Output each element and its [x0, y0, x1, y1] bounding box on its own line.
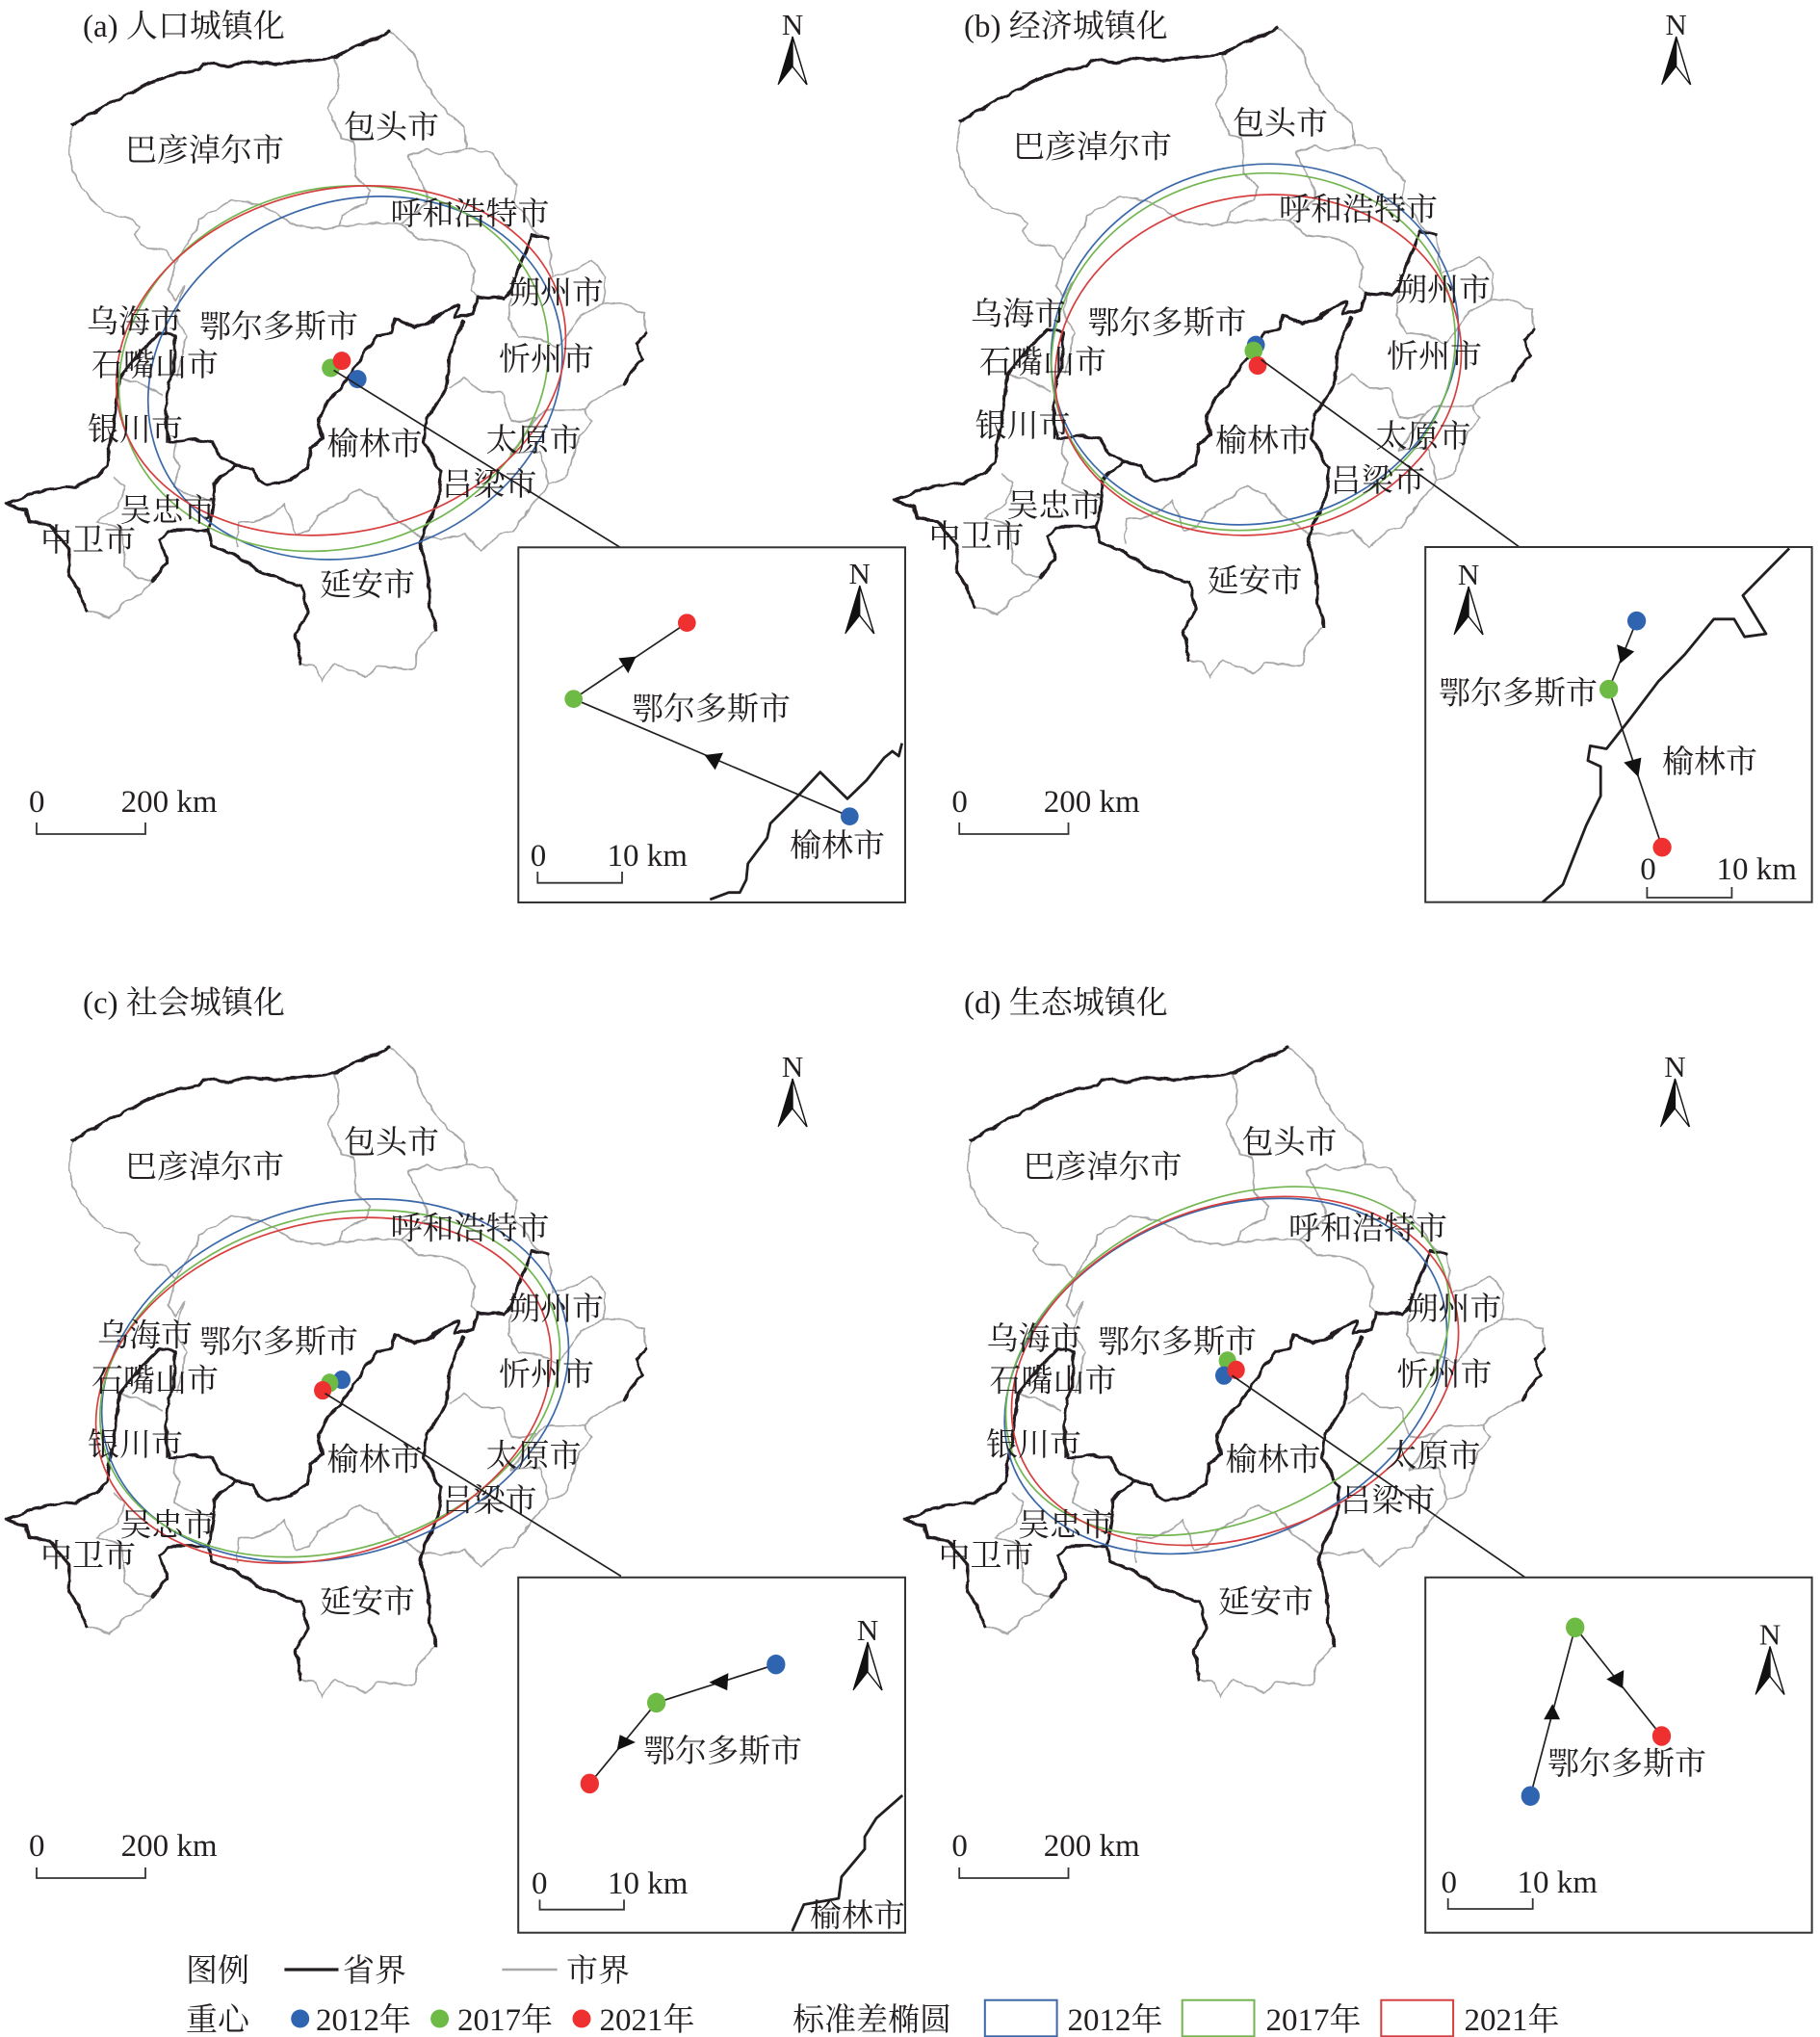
city labels d: 吕梁市 [1340, 1483, 1435, 1519]
centroids and connector c [314, 1371, 621, 1577]
legend: standard deviation ellipses: 2021年 [1464, 2002, 1560, 2037]
city labels a: 鄂尔多斯市 [199, 309, 358, 345]
centroids and connector a [322, 352, 620, 547]
base map c [7, 1047, 645, 1697]
city labels b: 乌海市 [971, 297, 1066, 332]
city labels a: 太原市 [485, 423, 582, 458]
legend: centroids [186, 2002, 695, 2037]
city labels a: 乌海市 [87, 304, 182, 340]
city labels a: 银川市 [88, 412, 183, 448]
city labels c: 银川市 [88, 1427, 183, 1463]
north arrow c [778, 1050, 807, 1127]
title a: (a) 人口城镇化 [83, 9, 285, 44]
north arrow d [1660, 1050, 1689, 1127]
city labels d: 榆林市 [1225, 1443, 1321, 1477]
panel: (b) economic urbanization [895, 8, 1812, 902]
city labels c: 榆林市 [327, 1443, 422, 1477]
scale bar b: 0 [951, 785, 968, 820]
city labels c: 吴忠市 [119, 1507, 216, 1543]
city labels a: 榆林市 [327, 427, 422, 462]
city labels a: 呼和浩特市 [391, 196, 549, 232]
legend: boundaries [186, 1953, 630, 1989]
city labels d: 忻州市 [1396, 1357, 1493, 1393]
city labels c [40, 1125, 604, 1620]
legend: centroids: 2017年 [457, 2002, 553, 2037]
city labels a: 朔州市 [508, 275, 604, 311]
inset d: 10 km [1518, 1866, 1598, 1900]
city labels a: 石嘴山市 [91, 348, 219, 383]
inset a: 10 km [607, 839, 688, 874]
city labels b [928, 106, 1491, 599]
city labels b: 包头市 [1233, 106, 1328, 142]
city labels b: 石嘴山市 [979, 345, 1106, 380]
city labels b: 鄂尔多斯市 [1088, 305, 1246, 341]
inset d: 0 [1441, 1866, 1457, 1900]
panel: (a) population urbanization [7, 8, 905, 902]
city labels b: 太原市 [1375, 419, 1471, 455]
title d: (d) 生态城镇化 [964, 985, 1168, 1021]
city labels d: 延安市 [1218, 1584, 1313, 1620]
legend: centroids: 重心 [186, 2002, 251, 2037]
city labels d: 呼和浩特市 [1288, 1212, 1447, 1247]
legend: centroids: 2012年 [316, 2002, 411, 2037]
inset c [518, 1578, 905, 1934]
city labels d: 巴彦淖尔市 [1023, 1150, 1183, 1186]
inset a: 鄂尔多斯市 [632, 692, 791, 727]
city labels b: 中卫市 [928, 519, 1025, 555]
city labels c: 巴彦淖尔市 [125, 1150, 284, 1186]
inset d [1425, 1578, 1812, 1933]
scale bar d: 200 km [1044, 1829, 1140, 1864]
scale bar c: 200 km [121, 1829, 218, 1864]
inset d: 鄂尔多斯市 [1547, 1746, 1706, 1782]
city labels a [40, 110, 604, 603]
base map b [895, 27, 1533, 677]
city labels c: 朔州市 [508, 1292, 604, 1327]
city labels a: 延安市 [320, 567, 415, 603]
city labels d: 吴忠市 [1018, 1507, 1113, 1543]
legend: boundaries: 市界 [566, 1953, 630, 1989]
scale bar a: 0 [29, 785, 44, 820]
city labels d: 鄂尔多斯市 [1098, 1324, 1257, 1360]
city labels d: 包头市 [1242, 1125, 1337, 1161]
city labels c: 呼和浩特市 [391, 1212, 549, 1247]
city labels c: 中卫市 [40, 1539, 136, 1574]
panel: (d) ecological urbanization [905, 985, 1812, 1933]
scale bar c [29, 1829, 218, 1878]
city labels b: 银川市 [975, 408, 1071, 444]
city labels b: 吕梁市 [1330, 463, 1425, 499]
legend: centroids: 2021年 [599, 2002, 695, 2037]
city labels b: 榆林市 [1215, 423, 1311, 458]
inset a: 0 [531, 839, 546, 874]
city labels c: 延安市 [320, 1584, 415, 1620]
city labels c: 包头市 [344, 1125, 439, 1161]
legend: standard deviation ellipses: 标准差椭圆 [793, 2002, 951, 2037]
city labels d: 石嘴山市 [990, 1363, 1117, 1398]
legend: standard deviation ellipses: 2012年 [1067, 2002, 1163, 2037]
base map a [7, 31, 645, 681]
inset b: 鄂尔多斯市 [1439, 675, 1598, 711]
city labels a: 忻州市 [499, 342, 594, 378]
scale bar d [951, 1829, 1140, 1878]
inset a [518, 547, 905, 902]
legend [186, 1953, 1560, 2037]
city labels c: 太原市 [485, 1439, 582, 1475]
standard deviation ellipses a [90, 186, 593, 560]
city labels b: 呼和浩特市 [1279, 192, 1438, 227]
city labels d: 太原市 [1385, 1439, 1481, 1475]
inset c: 鄂尔多斯市 [643, 1734, 802, 1769]
city labels a: 包头市 [344, 110, 439, 145]
city labels c: 乌海市 [97, 1319, 193, 1354]
city labels c: 石嘴山市 [91, 1363, 219, 1398]
city labels b: 巴彦淖尔市 [1013, 129, 1172, 166]
standard deviation ellipses b [1036, 164, 1475, 535]
scale bar b: 200 km [1044, 785, 1140, 820]
legend: boundaries: 省界 [343, 1953, 406, 1989]
city labels d: 乌海市 [986, 1321, 1082, 1357]
inset b: 榆林市 [1662, 744, 1757, 780]
city labels d: 银川市 [986, 1427, 1081, 1463]
north arrow a [778, 8, 807, 85]
inset b: 0 [1640, 852, 1656, 887]
city labels a: 吕梁市 [441, 467, 537, 503]
city labels d [938, 1125, 1502, 1620]
scale bar c: 0 [29, 1829, 44, 1864]
scale bar b [951, 785, 1140, 834]
city labels b: 延安市 [1208, 563, 1302, 599]
city labels c: 忻州市 [499, 1357, 594, 1393]
inset a: 榆林市 [790, 828, 885, 864]
city labels d: 朔州市 [1406, 1292, 1502, 1327]
scale bar a: 200 km [121, 785, 218, 820]
north arrow b [1662, 8, 1691, 85]
city labels d: 中卫市 [938, 1539, 1034, 1574]
centroids and connector d [1215, 1351, 1525, 1578]
inset b: 10 km [1716, 852, 1797, 887]
city labels b: 吴忠市 [1007, 488, 1102, 524]
centroids and connector b [1244, 336, 1521, 548]
title c: (c) 社会城镇化 [83, 985, 285, 1021]
legend: standard deviation ellipses [793, 2000, 1560, 2037]
legend: standard deviation ellipses: 2017年 [1265, 2002, 1362, 2037]
inset b [1425, 547, 1812, 902]
inset c: 榆林市 [810, 1898, 905, 1934]
city labels c: 吕梁市 [441, 1483, 537, 1519]
standard deviation ellipses d [949, 1187, 1507, 1554]
scale bar d: 0 [951, 1829, 968, 1864]
scale bar a [29, 785, 218, 834]
panel: (c) social urbanization [7, 985, 905, 1934]
city labels b: 忻州市 [1387, 339, 1482, 375]
city labels a: 吴忠市 [119, 493, 216, 529]
legend: boundaries: 图例 [186, 1953, 249, 1989]
inset c: 10 km [608, 1867, 689, 1901]
city labels a: 中卫市 [40, 523, 136, 559]
inset c: 0 [532, 1867, 547, 1901]
city labels b: 朔州市 [1395, 273, 1491, 308]
city labels a: 巴彦淖尔市 [125, 133, 284, 169]
base map d [905, 1047, 1544, 1697]
city labels c: 鄂尔多斯市 [199, 1324, 358, 1360]
title b: (b) 经济城镇化 [964, 9, 1168, 44]
standard deviation ellipses c [57, 1199, 606, 1563]
